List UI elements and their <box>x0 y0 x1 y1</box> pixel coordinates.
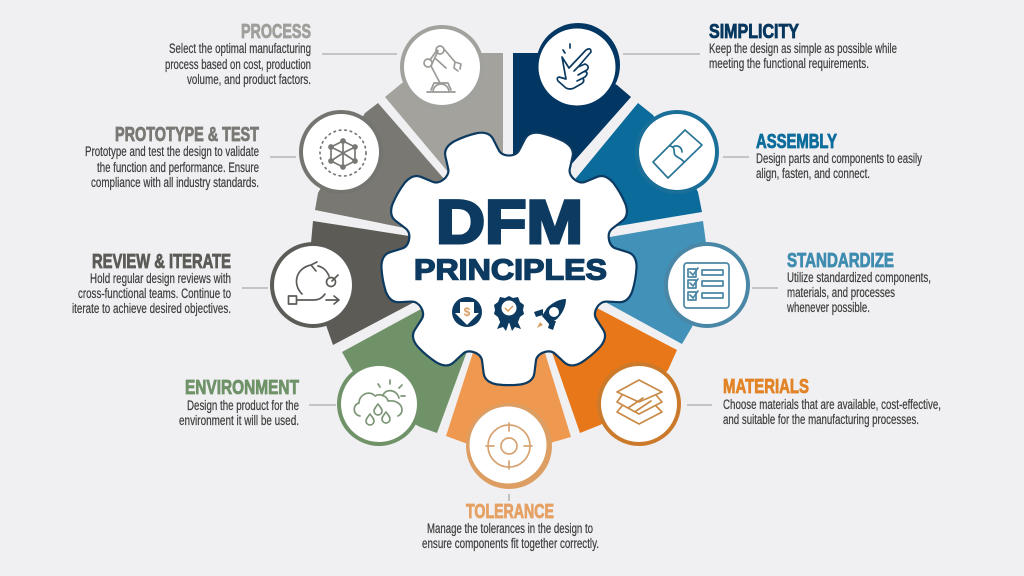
text: standardize: STANDARDIZE <box>787 250 894 272</box>
text: assembly <box>723 131 922 181</box>
icon: cost reduction <box>452 297 482 327</box>
icon: checklist <box>684 263 729 308</box>
panel: simplicity <box>513 23 631 167</box>
text: environment: Design the product for the <box>187 398 299 413</box>
text: tolerance: Manage the tolerances in the design to <box>427 521 593 536</box>
text: standardize: materials, and processes <box>787 285 895 300</box>
panel: materials <box>546 296 681 446</box>
panel: review and iterate <box>270 221 422 345</box>
icon: wireframe cube <box>320 130 366 176</box>
text: review and iterate: iterate to achieve desired objectives. <box>72 301 231 316</box>
panel: tolerance <box>446 340 571 489</box>
text: materials <box>687 376 941 427</box>
text: prototype and test: the function and performance. Ensure <box>97 160 259 175</box>
title <box>414 188 607 286</box>
central gear <box>378 126 640 384</box>
title: DFM <box>436 188 583 256</box>
icon: robot arm <box>424 46 461 92</box>
text: review and iterate: REVIEW & ITERATE <box>92 251 231 273</box>
text: process: volume, and product factors. <box>187 72 311 87</box>
icon: quality badge <box>494 296 524 331</box>
text: standardize <box>752 250 931 315</box>
icon: rocket <box>534 299 566 330</box>
text: process: Select the optimal manufacturing <box>169 41 311 56</box>
text: materials: and suitable for the manufacturing processes. <box>723 412 919 427</box>
text: standardize: Utilize standardized components, <box>787 270 931 285</box>
text: tolerance: ensure components fit together correctly. <box>422 536 599 551</box>
panel: environment <box>337 296 473 446</box>
text: simplicity: meeting the functional requirements. <box>709 56 869 71</box>
text: environment <box>179 377 336 428</box>
text: assembly: align, fasten, and connect. <box>756 166 870 181</box>
text: materials: MATERIALS <box>723 376 809 398</box>
panel: standardize <box>598 221 750 344</box>
text: process: PROCESS <box>241 21 311 43</box>
text: assembly: Design parts and components to easily <box>756 151 922 166</box>
text: review and iterate: Hold regular design reviews with <box>90 271 231 286</box>
panel: process <box>385 25 503 172</box>
text: process <box>165 21 397 87</box>
text: environment: ENVIRONMENT <box>185 377 299 399</box>
panel: assembly <box>572 103 719 229</box>
icon: target <box>486 423 532 469</box>
text: prototype and test: Prototype and test the design to validate <box>85 144 259 159</box>
title: PRINCIPLES <box>414 254 607 286</box>
text: prototype and test: PROTOTYPE & TEST <box>115 124 259 146</box>
icon: cost reduction: $ <box>464 305 471 319</box>
text: review and iterate: cross-functional teams. Continue to <box>78 286 231 301</box>
text: prototype and test: compliance with all industry standards. <box>91 175 259 190</box>
panel: prototype and test <box>299 103 445 232</box>
text: materials: Choose materials that are available, cost-effective, <box>723 397 941 412</box>
text: tolerance <box>422 494 599 551</box>
icon: puzzle pieces <box>653 130 702 178</box>
text: simplicity: SIMPLICITY <box>709 21 800 43</box>
icon: layers <box>617 380 662 424</box>
text: prototype and test <box>85 124 296 190</box>
icon: weather <box>354 380 405 425</box>
text: standardize: whenever possible. <box>786 300 870 315</box>
text: assembly: ASSEMBLY <box>756 131 837 153</box>
text: simplicity: Keep the design as simple as possible while <box>709 41 897 56</box>
text: environment: environment it will be used. <box>179 413 299 428</box>
icon: pointing hand <box>557 44 591 89</box>
text: tolerance: TOLERANCE <box>466 501 554 523</box>
text: process: process based on cost, production <box>165 57 311 72</box>
icon: iterate loop <box>288 262 339 304</box>
text: simplicity <box>623 21 897 71</box>
text: review and iterate <box>72 251 268 316</box>
